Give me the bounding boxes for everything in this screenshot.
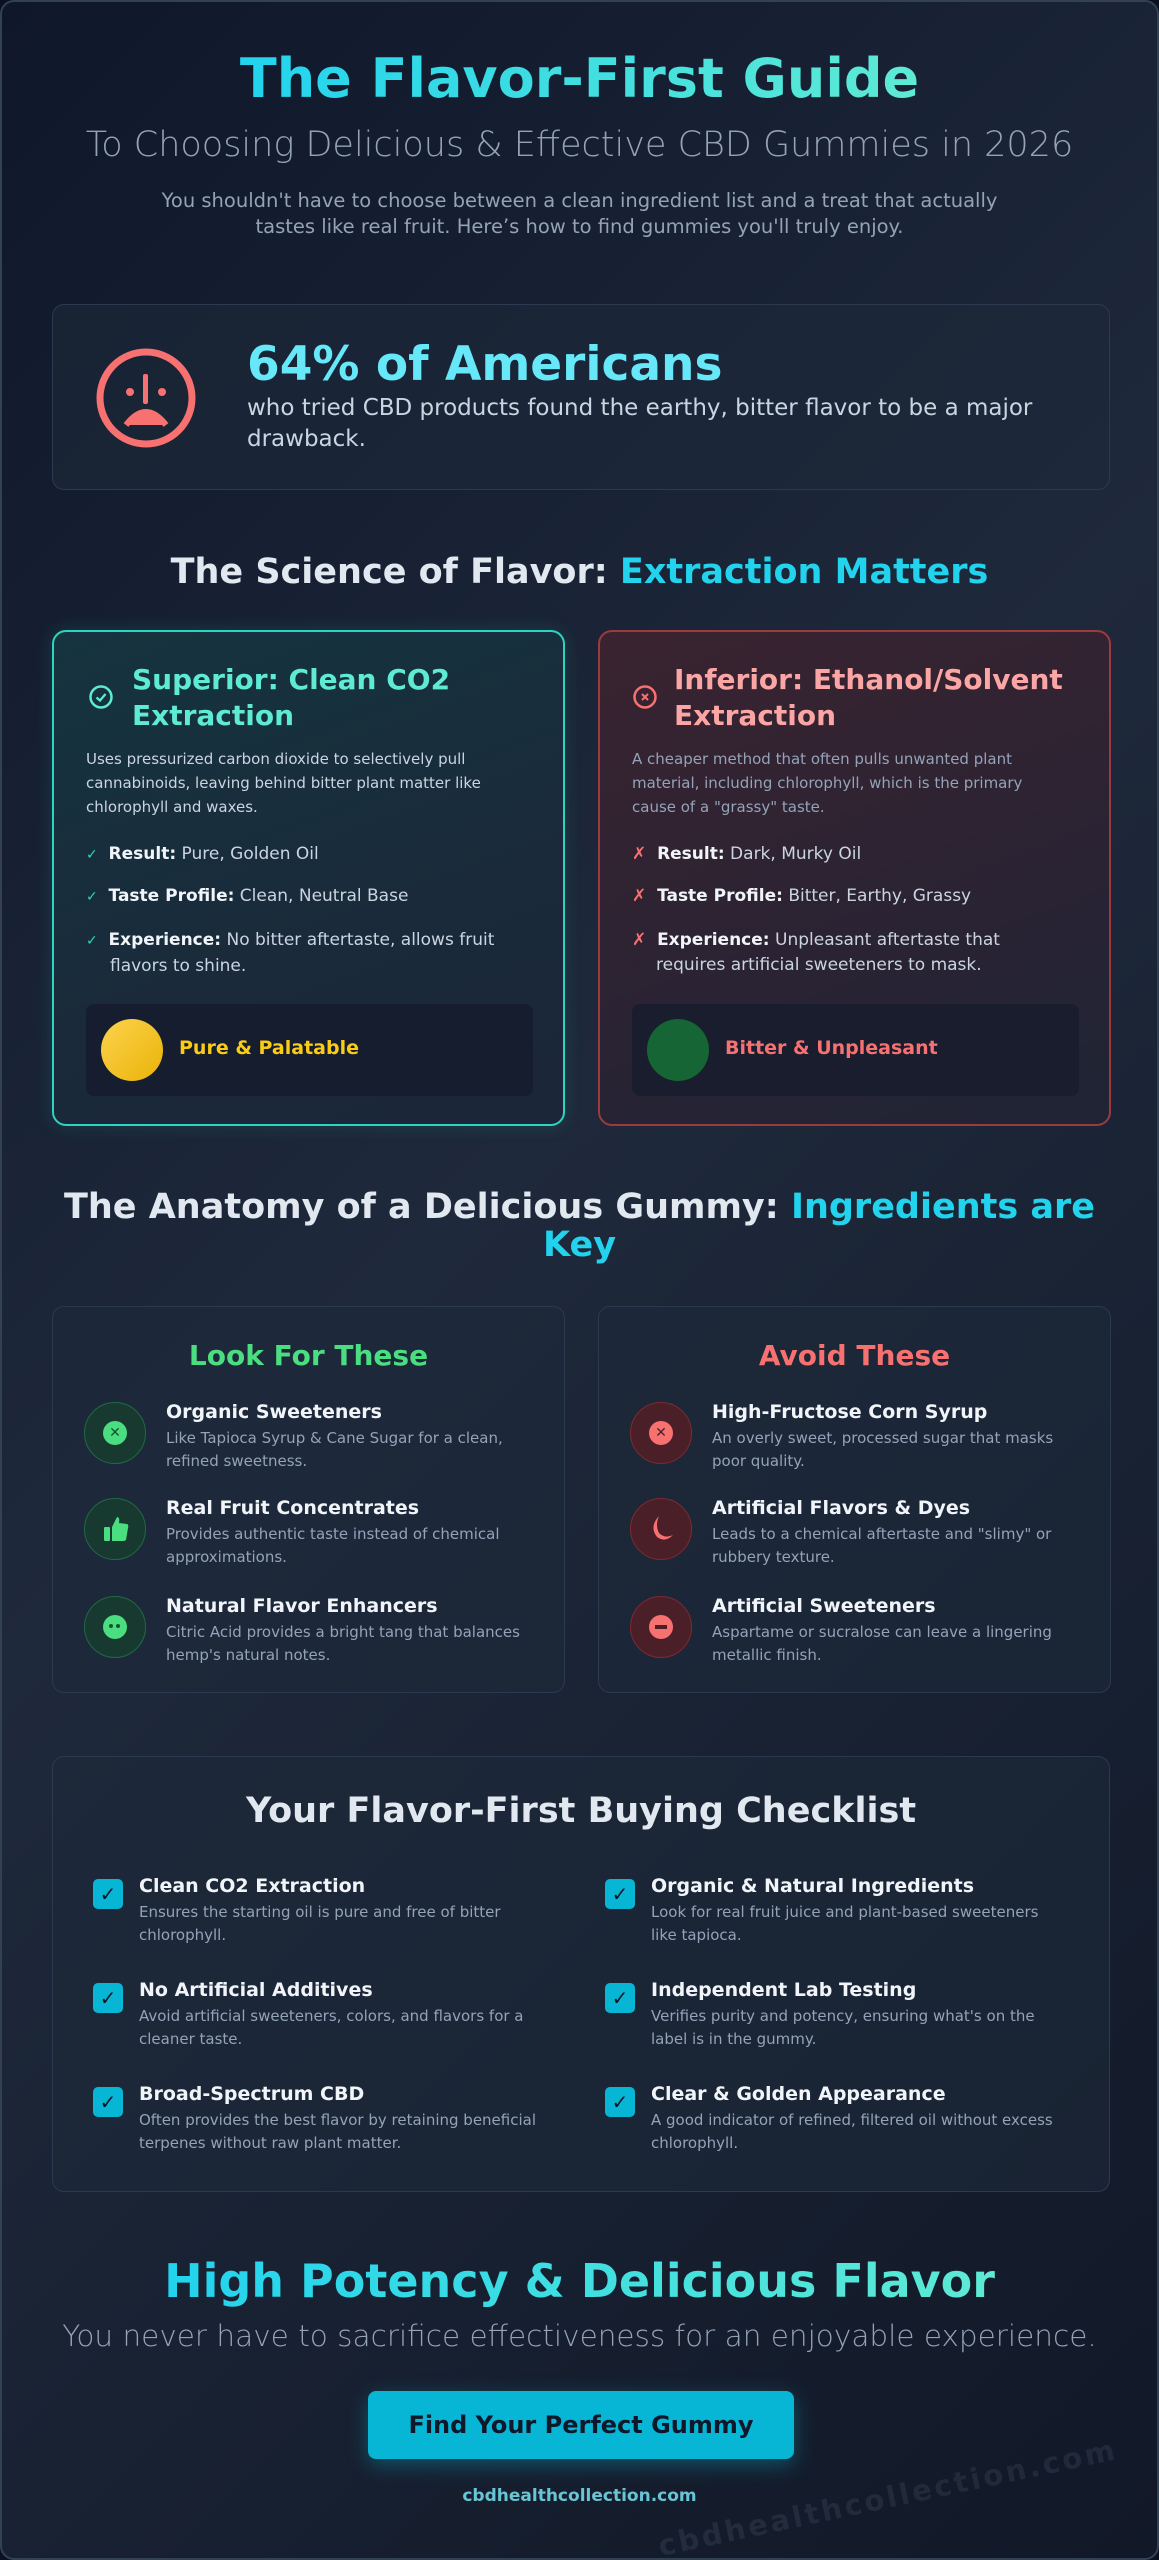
watermark: cbdhealthcollection.com xyxy=(655,2432,1121,2560)
description xyxy=(632,750,1022,816)
item: broad spectrum xyxy=(93,2083,536,2152)
item: lab testing: ✓ xyxy=(612,1986,628,2010)
heading: anatomy: Key xyxy=(543,1225,616,1265)
item: organic sweeteners: Organic Sweeteners xyxy=(166,1401,382,1423)
item: HFCS: ✕ xyxy=(655,1425,667,1441)
CTA button xyxy=(368,2391,794,2459)
item: lab testing: Independent Lab Testing xyxy=(651,1979,916,2001)
item: sweeteners: Aspartame or sucralose can leave a lingering xyxy=(712,1623,1052,1641)
item: appearance: chlorophyll. xyxy=(651,2134,738,2152)
icon: sad face xyxy=(96,348,196,448)
item: broad spectrum: terpenes without raw plant matter. xyxy=(139,2134,401,2152)
item: lab testing: label is in the gummy. xyxy=(651,2030,816,2048)
subtitle: To Choosing Delicious & Effective CBD Gummies in 2026 xyxy=(86,125,1073,165)
intro text: You shouldn't have to choose between a clean ingredient list and a treat that actually xyxy=(162,189,997,212)
item: additives xyxy=(93,1979,524,2048)
list: ✗ Result: Dark, Murky Oil xyxy=(632,844,861,864)
heading: Your Flavor-First Buying Checklist xyxy=(246,1791,916,1831)
item: additives: ✓ xyxy=(100,1986,116,2010)
url: cbdhealthcollection.com xyxy=(462,2486,697,2506)
item: CO2: chlorophyll. xyxy=(139,1926,226,1944)
item: natural enhancers: hemp's natural notes. xyxy=(166,1646,330,1664)
swatch: golden xyxy=(86,1004,533,1096)
list: ✓ Result: Pure, Golden Oil xyxy=(86,844,319,864)
item: real fruit: Real Fruit Concentrates xyxy=(166,1497,419,1519)
item: sweeteners: metallic finish. xyxy=(712,1646,822,1664)
swatch: dark green: Bitter & Unpleasant xyxy=(725,1037,938,1059)
item: HFCS xyxy=(630,1401,1053,1470)
CTA button: Find Your Perfect Gummy xyxy=(408,2411,754,2439)
item: real fruit: approximations. xyxy=(166,1548,287,1566)
item: CO2: Ensures the starting oil is pure and free of bitter xyxy=(139,1903,501,1921)
card heading: Inferior: Ethanol/Solvent xyxy=(674,663,1063,696)
icon: check circle xyxy=(89,685,113,709)
card heading: Extraction xyxy=(674,699,836,732)
item: additives: Avoid artificial sweeteners, colors, and flavors for a xyxy=(139,2007,524,2025)
card heading xyxy=(674,663,1063,732)
item: CO2 xyxy=(93,1875,501,1944)
intro text xyxy=(162,189,997,238)
panel: superior: ✓ Experience: No bitter aftertaste, allows fruit flavors to shine. xyxy=(86,930,494,976)
item: natural enhancers: Natural Flavor Enhancers xyxy=(166,1595,438,1617)
panel: stat xyxy=(52,304,1110,490)
closing subtitle: You never have to sacrifice effectiveness for an enjoyable experience. xyxy=(62,2319,1097,2353)
item: organic sweeteners xyxy=(84,1401,503,1470)
swatch: dark green xyxy=(632,1004,1079,1096)
card heading: Superior: Clean CO2 xyxy=(132,663,450,696)
item: organic: Organic & Natural Ingredients xyxy=(651,1875,974,1897)
panel: inferior xyxy=(598,630,1111,1126)
description: Uses pressurized carbon dioxide to selectively pull cannabinoids, leaving behind bitter plant matter like chlorophyll and waxes. xyxy=(86,750,481,816)
item: organic: ✓ xyxy=(612,1882,628,1906)
item: flavors & dyes: rubbery texture. xyxy=(712,1548,835,1566)
item: appearance: Clear & Golden Appearance xyxy=(651,2083,946,2105)
item: lab testing xyxy=(605,1979,1035,2048)
item: broad spectrum: Broad-Spectrum CBD xyxy=(139,2083,364,2105)
intro text: tastes like real fruit. Here’s how to find gummies you'll truly enjoy. xyxy=(255,215,904,238)
item: natural enhancers: Citric Acid provides a bright tang that balances xyxy=(166,1623,520,1641)
item: lab testing: Verifies purity and potency, ensuring what's on the xyxy=(651,2007,1035,2025)
item: organic sweeteners: Like Tapioca Syrup & Cane Sugar for a clean, xyxy=(166,1429,503,1447)
item: HFCS: High-Fructose Corn Syrup xyxy=(712,1401,987,1423)
heading: Look For These xyxy=(189,1339,428,1372)
panel: look for these xyxy=(52,1306,565,1693)
description: cause of a "grassy" taste. xyxy=(632,798,825,816)
title: The Flavor-First Guide xyxy=(240,47,919,110)
item: organic sweeteners: refined sweetness. xyxy=(166,1452,307,1470)
item: broad spectrum: Often provides the best flavor by retaining beneficial xyxy=(139,2111,536,2129)
panel: inferior: ✗ Experience: Unpleasant aftertaste that requires artificial sweeteners to mask. xyxy=(632,930,1000,975)
heading: science: The Science of Flavor: Extraction Matters xyxy=(171,552,988,592)
card heading: Extraction xyxy=(132,699,294,732)
panel: superior: ✓ Taste Profile: Clean, Neutral Base xyxy=(86,886,408,906)
panel: inferior: ✗ Taste Profile: Bitter, Earthy, Grassy xyxy=(632,886,971,906)
item: appearance: ✓ xyxy=(612,2090,628,2114)
item: additives: cleaner taste. xyxy=(139,2030,242,2048)
item: sweeteners: Artificial Sweeteners xyxy=(712,1595,936,1617)
heading: anatomy: The Anatomy of a Delicious Gummy: Ingredients are xyxy=(64,1187,1095,1227)
item: flavors & dyes xyxy=(630,1497,1052,1566)
panel: avoid these xyxy=(598,1306,1111,1693)
heading: anatomy xyxy=(64,1187,1095,1265)
item: organic xyxy=(605,1875,1038,1944)
item: CO2: ✓ xyxy=(100,1882,116,1906)
item: broad spectrum: ✓ xyxy=(100,2090,116,2114)
closing heading: High Potency & Delicious Flavor xyxy=(164,2254,995,2308)
item: HFCS: An overly sweet, processed sugar that masks xyxy=(712,1429,1053,1447)
item: sweeteners xyxy=(630,1595,1052,1664)
item: flavors & dyes: Leads to a chemical aftertaste and "slimy" or xyxy=(712,1525,1051,1543)
heading: Avoid These xyxy=(759,1339,950,1372)
item: organic: like tapioca. xyxy=(651,1926,742,1944)
item: natural enhancers xyxy=(84,1595,520,1664)
item: additives: No Artificial Additives xyxy=(139,1979,373,2001)
item: real fruit: Provides authentic taste instead of chemical xyxy=(166,1525,500,1543)
panel: superior xyxy=(52,630,565,1126)
item: appearance: A good indicator of refined, filtered oil without excess xyxy=(651,2111,1053,2129)
item: flavors & dyes: Artificial Flavors & Dyes xyxy=(712,1497,970,1519)
panel: checklist xyxy=(52,1756,1110,2192)
stat text: who tried CBD products found the earthy, bitter flavor to be a major drawback. xyxy=(247,395,1032,452)
item: real fruit xyxy=(84,1497,500,1566)
description: A cheaper method that often pulls unwanted plant material, including chlorophyll, which is the primary xyxy=(632,750,1022,792)
stat heading: 64% of Americans xyxy=(247,337,722,392)
icon: x circle xyxy=(633,685,657,709)
item: organic: Look for real fruit juice and plant-based sweeteners xyxy=(651,1903,1038,1921)
item: HFCS: poor quality. xyxy=(712,1452,805,1470)
item: appearance xyxy=(605,2083,1053,2152)
card heading xyxy=(132,663,450,732)
swatch: golden: Pure & Palatable xyxy=(179,1037,359,1059)
item: CO2: Clean CO2 Extraction xyxy=(139,1875,365,1897)
item: organic sweeteners: ✕ xyxy=(109,1425,121,1441)
